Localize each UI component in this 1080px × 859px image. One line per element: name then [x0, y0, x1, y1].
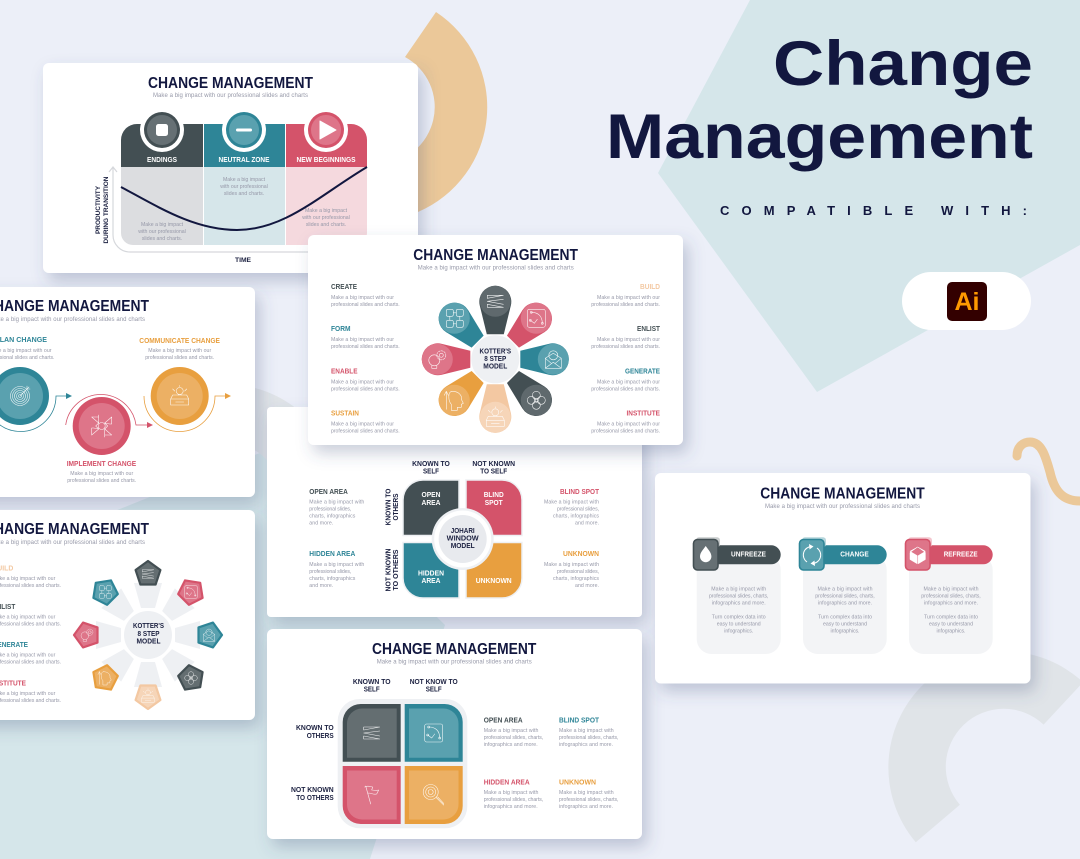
step: implement change: professional slides and charts.	[67, 478, 136, 484]
text: unknown: Make a big impact with	[559, 790, 614, 796]
column: refreeze: Turn complex data into	[924, 615, 978, 621]
text: open area: infographics and more.	[484, 742, 538, 748]
list: generate	[591, 368, 660, 392]
text: hidden area: charts, infographics	[309, 576, 356, 582]
column: endings: Make a big impact	[141, 222, 184, 228]
list: build: Make a big impact with our	[597, 295, 660, 301]
title: CHANGE MANAGEMENT	[148, 75, 313, 92]
text: hidden area: infographics and more.	[484, 804, 538, 810]
hub: johari window model: JOHARI	[451, 526, 475, 535]
text: hidden area: HIDDEN AREA	[309, 551, 355, 558]
step: implement change: IMPLEMENT CHANGE	[67, 461, 137, 468]
petal: north east	[502, 296, 559, 353]
text: blind spot: Make a big impact with	[559, 728, 614, 734]
panel: kotter pentagons	[0, 510, 255, 720]
title: CHANGE MANAGEMENT	[413, 247, 578, 264]
list: build	[591, 284, 660, 308]
hub: kotter model: 8 STEP	[484, 354, 506, 363]
text: open area: professional slides,	[309, 507, 351, 513]
pentagon: south	[136, 686, 160, 709]
text: open area	[309, 489, 364, 527]
petal: west	[422, 343, 470, 375]
quadrant: unknown	[466, 542, 522, 598]
pentagon: west	[74, 623, 98, 647]
step: communicate change: professional slides and charts.	[145, 355, 214, 361]
column: new beginnings	[286, 108, 367, 245]
column header: known to self	[353, 677, 391, 694]
text: hidden area: HIDDEN AREA	[484, 779, 530, 786]
matrix backing	[338, 699, 467, 828]
text: blind spot: charts, infographics	[553, 514, 599, 520]
pentagon: south east	[175, 662, 209, 696]
quadrant: unknown: UNKNOWN	[476, 576, 512, 585]
list: form: Make a big impact with our	[331, 337, 394, 343]
list: form: FORM	[331, 326, 351, 333]
petal: north	[479, 286, 511, 334]
badge: Adobe Illustrator: Ai	[954, 288, 980, 316]
list: generate: Make a big impact with our	[597, 380, 660, 386]
hub: kotter model: MODEL	[136, 636, 161, 646]
petal: south east	[502, 366, 559, 423]
quadrant: blind spot	[466, 480, 522, 536]
text: unknown: infographics and more.	[559, 804, 613, 810]
column: change: easy to understand	[823, 622, 867, 628]
text: open area: Make a big impact with	[484, 728, 539, 734]
text: unknown	[544, 551, 599, 589]
column: change: Turn complex data into	[818, 615, 872, 621]
column header: known to self: SELF	[423, 466, 440, 476]
subtitle: Make a big impact with our professional slides and charts	[418, 266, 574, 272]
x axis label: TIME	[235, 257, 252, 264]
shape: teal polygon top right	[658, 0, 1080, 392]
quadrant: top left	[343, 704, 401, 762]
column: change: professional slides, charts,	[815, 594, 875, 600]
axes	[109, 167, 320, 252]
row header: known to others: KNOWN TO	[296, 723, 334, 732]
quadrant: bottom right	[405, 766, 463, 824]
hub: kotter model	[471, 335, 519, 383]
quadrant: hidden area: HIDDEN	[418, 569, 444, 578]
column header: known to self: SELF	[364, 685, 380, 694]
list: sustain: Make a big impact with our	[331, 422, 394, 428]
column: unfreeze: Turn complex data into	[712, 615, 766, 621]
column: new beginnings: with our professional	[302, 215, 350, 221]
panel: unfreeze change refreeze	[655, 473, 1030, 684]
text: hidden area	[484, 779, 543, 810]
text: unknown	[559, 779, 618, 810]
list: sustain: professional slides and charts.	[331, 428, 400, 434]
column header: not known to self: TO SELF	[480, 466, 508, 476]
list: create: CREATE	[331, 284, 357, 291]
column: new beginnings: NEW BEGINNINGS	[296, 155, 356, 164]
column: unfreeze: Make a big impact with	[711, 587, 766, 593]
list: enlist: professional slides and charts.	[591, 344, 660, 350]
step: communicate change: Make a big impact with our	[148, 348, 211, 354]
text: hidden area: Make a big impact with	[309, 562, 364, 568]
text: blind spot: infographics and more.	[559, 742, 613, 748]
row header: not known to others	[291, 785, 334, 802]
column: endings: with our professional	[138, 229, 186, 235]
text: blind spot: professional slides,	[557, 507, 599, 513]
row header: known to others	[384, 488, 400, 526]
hub: kotter model: MODEL	[483, 362, 508, 370]
column: change: CHANGE	[840, 550, 869, 559]
pentagon: north	[136, 561, 160, 584]
y axis label: PRODUCTIVITY	[95, 185, 102, 234]
list: enlist	[591, 326, 661, 350]
list: create	[331, 284, 400, 308]
title: CHANGE MANAGEMENT	[760, 485, 925, 502]
column: unfreeze: professional slides, charts,	[709, 594, 768, 600]
hub: johari window model: WINDOW	[447, 534, 479, 542]
step: plan change	[0, 337, 72, 432]
list: institute	[0, 680, 61, 704]
text: blind spot: and more.	[575, 521, 599, 527]
column: unfreeze	[694, 537, 781, 654]
shape: orange squiggle	[1017, 442, 1080, 501]
pentagon: north east	[175, 574, 209, 608]
list: form: professional slides and charts.	[331, 344, 400, 350]
subtitle: Make a big impact with our professional slides and charts	[765, 504, 920, 510]
column: refreeze: infographics and more.	[924, 601, 978, 607]
y axis label: DURING TRANSITION	[103, 176, 110, 244]
column: change: Make a big impact with	[818, 587, 873, 593]
y axis label	[95, 176, 110, 244]
list: enable	[331, 368, 400, 392]
shape: orange arc	[380, 12, 487, 212]
column: neutral zone	[204, 108, 285, 245]
pentagon: south west	[87, 662, 121, 696]
text: hidden area: professional slides, charts,	[484, 797, 543, 803]
column: refreeze: infographics.	[936, 629, 966, 635]
text: blind spot: BLIND SPOT	[560, 489, 600, 496]
text: unknown: Make a big impact with	[544, 562, 599, 568]
main heading: Management	[606, 102, 1033, 172]
column: neutral zone: Make a big impact	[223, 177, 266, 183]
hub: kotter model: KOTTER'S	[133, 621, 164, 630]
hub: kotter model: 8 STEP	[138, 629, 160, 638]
productivity curve	[121, 167, 367, 230]
list: generate	[0, 642, 61, 666]
row header: known to others	[296, 723, 334, 740]
row header: known to others: KNOWN TO	[384, 488, 392, 526]
column header: not known to self	[472, 459, 515, 476]
panel: kotter 8 step petals	[308, 235, 683, 445]
list: generate: professional slides and charts.	[591, 386, 660, 392]
text: open area: professional slides, charts,	[484, 735, 543, 741]
step: communicate change: COMMUNICATE CHANGE	[139, 338, 220, 345]
column: new beginnings: slides and charts.	[306, 222, 346, 228]
list: enlist: Make a big impact with our	[597, 337, 660, 343]
column: neutral zone: with our professional	[220, 184, 268, 190]
quadrant: open area: AREA	[422, 498, 440, 507]
text: unknown: professional slides,	[557, 569, 599, 575]
column: endings: slides and charts.	[142, 236, 182, 242]
list: sustain: SUSTAIN	[331, 410, 359, 418]
badge: Adobe Illustrator	[902, 272, 1031, 330]
column: change: infographics and more.	[818, 601, 872, 607]
text: open area: Make a big impact with	[309, 500, 364, 506]
text: open area: OPEN AREA	[309, 489, 348, 496]
row header: not known to others: TO OTHERS	[296, 793, 334, 802]
main heading	[606, 29, 1033, 172]
column: endings	[121, 108, 203, 245]
column header: not know to self: SELF	[426, 685, 442, 694]
column: unfreeze: UNFREEZE	[731, 550, 766, 559]
step: communicate change	[139, 338, 231, 432]
text: blind spot	[559, 717, 618, 748]
column: unfreeze: infographics and more.	[712, 601, 766, 607]
quadrant: bottom left	[343, 766, 401, 824]
title: CHANGE MANAGEMENT	[372, 641, 537, 658]
row header: not known to others: NOT KNOWN	[291, 785, 334, 794]
list: enlist: ENLIST	[637, 326, 661, 333]
petal: south	[479, 384, 511, 433]
petal: east	[520, 343, 569, 375]
text: blind spot	[544, 489, 600, 527]
list: build: BUILD	[640, 284, 660, 291]
column: change: infographics.	[830, 629, 860, 635]
column header: known to self	[412, 459, 450, 476]
row header: known to others: OTHERS	[307, 731, 334, 740]
list: create: Make a big impact with our	[331, 295, 394, 301]
quadrant: hidden area	[403, 542, 459, 598]
row header: not known to others: NOT KNOWN	[384, 548, 392, 592]
panel: plan communicate implement	[0, 287, 255, 497]
shape: grey ring left	[240, 385, 341, 500]
list: sustain	[331, 410, 400, 434]
list: enable: professional slides and charts.	[331, 386, 400, 392]
text: blind spot: BLIND SPOT	[559, 717, 600, 724]
column: new beginnings: Make a big impact	[305, 208, 348, 214]
quadrant: open area	[403, 480, 459, 536]
petal: north west	[432, 296, 489, 353]
petal: south west	[432, 366, 489, 423]
column header: not know to self	[410, 677, 458, 694]
panel: johari matrix	[267, 629, 642, 839]
column: refreeze: REFREEZE	[944, 550, 978, 559]
pentagon: north west	[87, 574, 121, 608]
column: neutral zone: NEUTRAL ZONE	[218, 155, 270, 164]
row header: not known to others	[384, 548, 400, 592]
step: implement change	[66, 394, 153, 484]
quadrant: top right	[405, 704, 463, 762]
list: build	[0, 566, 61, 589]
hub: johari window model: MODEL	[451, 541, 475, 550]
pentagon: east	[198, 623, 222, 647]
text: hidden area: professional slides,	[309, 569, 351, 575]
column header: known to self: KNOWN TO	[353, 677, 391, 686]
list: generate: GENERATE	[625, 368, 660, 376]
text: blind spot: Make a big impact with	[544, 500, 599, 506]
list: enable: Make a big impact with our	[331, 380, 394, 386]
step: implement change: Make a big impact with our	[70, 471, 133, 477]
column header: known to self: KNOWN TO	[412, 459, 450, 468]
quadrant: blind spot: BLIND	[484, 490, 504, 499]
text: open area: charts, infographics	[309, 514, 356, 520]
hub: kotter model	[124, 611, 172, 659]
quadrant: open area: OPEN	[422, 490, 440, 499]
text: hidden area: and more.	[309, 583, 333, 589]
list: build: professional slides and charts.	[591, 302, 660, 308]
column: refreeze	[906, 537, 993, 654]
row header: known to others: OTHERS	[391, 493, 400, 520]
text: open area: and more.	[309, 521, 333, 527]
list: institute: Make a big impact with our	[597, 422, 660, 428]
quadrant: blind spot: SPOT	[485, 498, 503, 507]
list: institute: professional slides and charts.	[591, 428, 660, 434]
text: open area	[484, 717, 543, 748]
quadrant: hidden area: AREA	[422, 576, 440, 585]
list: create: professional slides and charts.	[331, 302, 400, 308]
column: unfreeze: easy to understand	[717, 622, 761, 628]
list: enlist	[0, 604, 61, 628]
text: unknown: and more.	[575, 583, 599, 589]
text: unknown: UNKNOWN	[563, 551, 599, 558]
column: change	[800, 537, 887, 654]
column: refreeze: Make a big impact with	[924, 587, 979, 593]
main heading: Change	[773, 29, 1033, 99]
text: unknown: UNKNOWN	[559, 779, 596, 786]
text: blind spot: professional slides, charts,	[559, 735, 618, 741]
text: unknown: charts, infographics	[553, 576, 599, 582]
text: hidden area	[309, 551, 364, 589]
shape: teal polygon bottom left	[0, 450, 445, 859]
column: refreeze: easy to understand	[929, 622, 973, 628]
column: refreeze: professional slides, charts,	[921, 594, 981, 600]
column: endings: ENDINGS	[147, 155, 177, 164]
column: neutral zone: slides and charts.	[224, 191, 264, 197]
column: unfreeze: infographics.	[724, 629, 753, 635]
row header: not known to others: TO OTHERS	[391, 549, 400, 590]
panel: johari window	[267, 407, 642, 617]
shape: grey ring bottom right	[888, 651, 1080, 842]
text: hidden area: Make a big impact with	[484, 790, 539, 796]
hub: kotter model: KOTTER'S	[480, 346, 511, 356]
column header: not known to self: NOT KNOWN	[472, 459, 515, 468]
text: open area: OPEN AREA	[484, 717, 523, 724]
panel: transition model	[43, 63, 418, 273]
list: enable: ENABLE	[331, 368, 358, 376]
subtitle: Make a big impact with our professional slides and charts	[153, 93, 308, 99]
text: unknown: professional slides, charts,	[559, 797, 618, 803]
subheading: compatible with: COMPATIBLE WITH:	[720, 203, 1027, 218]
list: institute: INSTITUTE	[626, 410, 660, 418]
list: form	[331, 326, 400, 350]
list: institute	[591, 410, 660, 434]
column header: not know to self: NOT KNOW TO	[410, 677, 458, 686]
subtitle: Make a big impact with our professional slides and charts	[377, 660, 532, 666]
diagram: wedges	[96, 583, 200, 687]
hub: johari window model	[432, 508, 494, 570]
